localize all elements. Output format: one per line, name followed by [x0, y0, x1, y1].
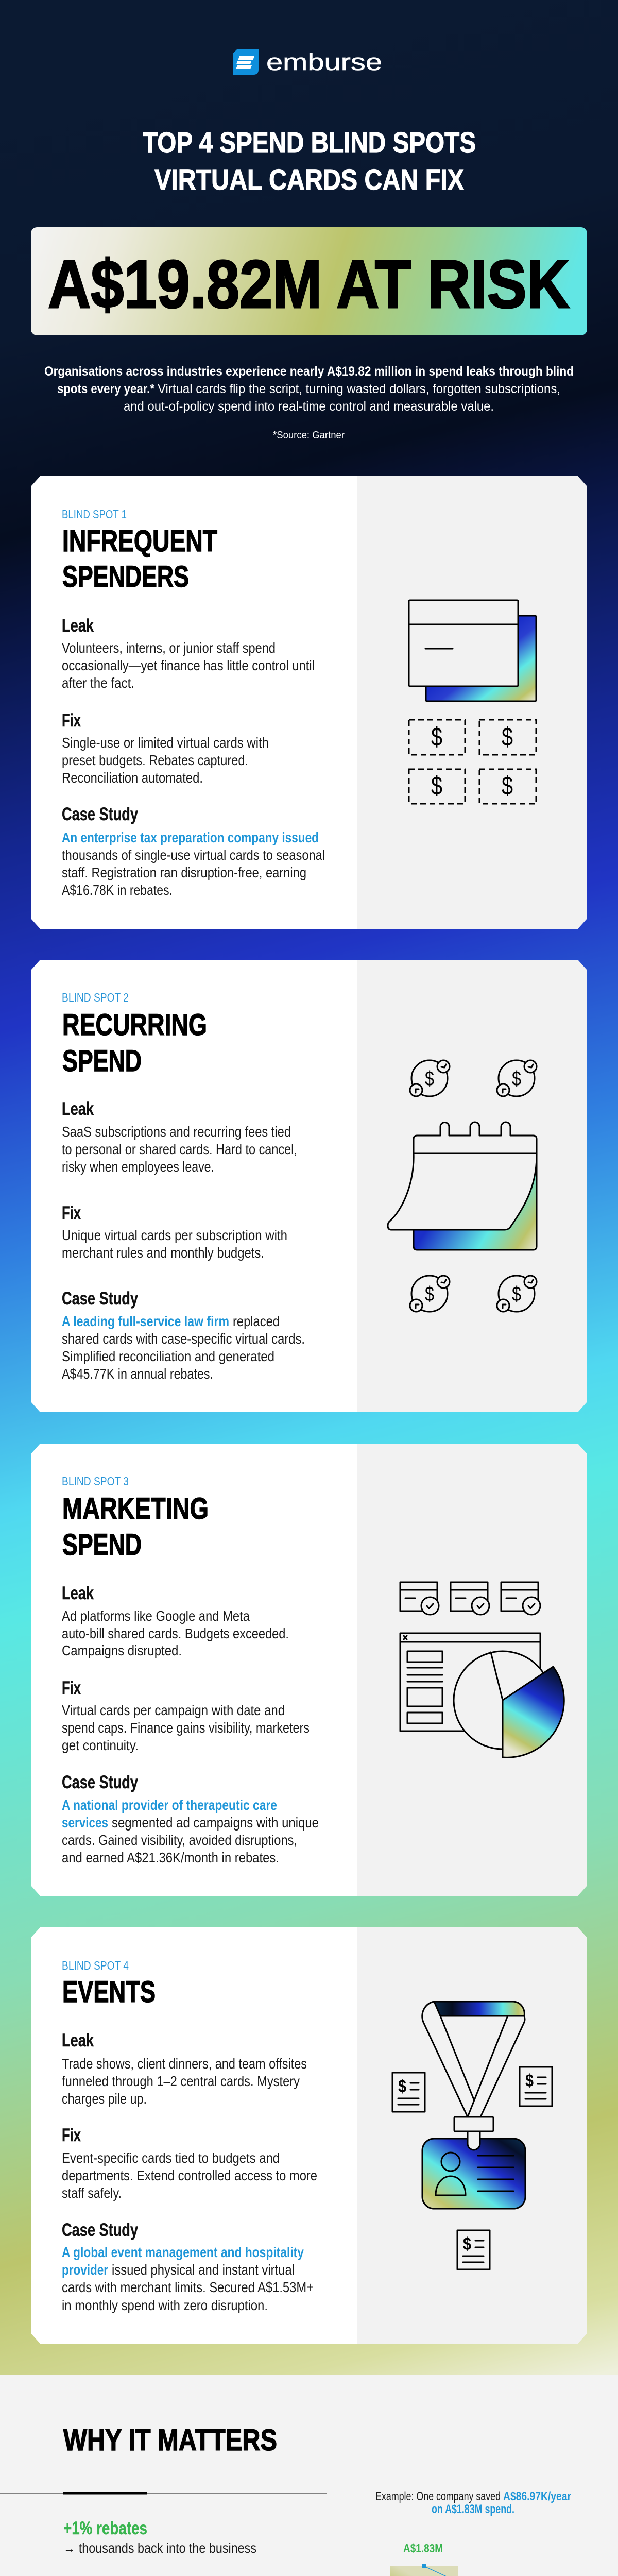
intro paragraph: and out-of-policy spend into real-time control and measurable value. — [124, 399, 494, 414]
heading: SPEND — [62, 1044, 142, 1078]
label: BLIND SPOT 3 — [62, 1475, 129, 1488]
case study: Case Study — [62, 1289, 138, 1309]
example caption — [375, 2489, 571, 2516]
leak: Leak — [62, 1099, 94, 1119]
icon: calendar with recurring coins: $ — [512, 1283, 521, 1306]
logo: emburse: emburse — [266, 49, 382, 75]
icon: lanyard badge with receipts: $ — [525, 2071, 534, 2091]
case study: issued physical and instant virtual — [112, 2262, 295, 2278]
leak: occasionally—yet finance has little control until — [62, 657, 315, 673]
leak: Ad platforms like Google and Meta — [62, 1608, 250, 1624]
case study: Simplified reconciliation and generated — [62, 1348, 274, 1364]
title: TOP 4 SPEND BLIND SPOTS — [143, 126, 476, 159]
intro paragraph — [44, 364, 574, 414]
case study: segmented ad campaigns with unique — [112, 1815, 319, 1831]
leak: after the fact. — [62, 675, 134, 691]
case study: cards with merchant limits. Secured A$1.53M+ — [62, 2279, 314, 2295]
leak: auto-bill shared cards. Budgets exceeded. — [62, 1625, 289, 1641]
fix: Fix — [62, 1203, 81, 1223]
fix: Fix — [62, 1678, 81, 1698]
heading: RECURRING — [62, 1008, 207, 1042]
case study — [62, 1772, 319, 1866]
fix: Single-use or limited virtual cards with — [62, 735, 269, 751]
heading — [62, 524, 217, 594]
case study — [62, 804, 325, 898]
panel: why it matters — [0, 2375, 618, 2576]
example caption: A$86.97K/year — [503, 2489, 571, 2503]
heading — [62, 1008, 207, 1078]
intro paragraph: Virtual cards flip the script, turning wasted dollars, forgotten subscriptions, — [158, 382, 560, 396]
heading — [62, 1492, 209, 1562]
case study: A$16.78K in rebates. — [62, 882, 173, 898]
fix: Fix — [62, 2125, 81, 2145]
case study: Case Study — [62, 1772, 138, 1792]
case study — [62, 1289, 305, 1382]
case study: replaced — [233, 1313, 280, 1329]
panel: blind spot 3 — [31, 1444, 587, 1896]
stat: rebates: → thousands back into the business — [63, 2540, 256, 2556]
fix: Virtual cards per campaign with date and — [62, 1702, 285, 1718]
example caption: on A$1.83M spend. — [432, 2502, 514, 2516]
logo: emburse — [233, 49, 382, 75]
label: BLIND SPOT 2 — [62, 991, 129, 1004]
panel: blind spot 2 — [31, 960, 587, 1412]
fix — [62, 2125, 317, 2201]
leak: SaaS subscriptions and recurring fees tied — [62, 1124, 291, 1140]
panel: blind spot 1 — [31, 476, 587, 929]
leak — [62, 1583, 289, 1658]
leak: Leak — [62, 616, 94, 636]
case study: shared cards with case-specific virtual cards. — [62, 1331, 305, 1347]
case study: An enterprise tax preparation company issued — [62, 829, 319, 845]
icon: stacked cards with dollar slots: $ — [431, 771, 442, 800]
leak: risky when employees leave. — [62, 1159, 214, 1175]
leak: Leak — [62, 2030, 94, 2050]
leak: Volunteers, interns, or junior staff spend — [62, 640, 276, 656]
source note: *Source: Gartner — [273, 430, 345, 441]
intro paragraph: Organisations across industries experience nearly A$19.82 million in spend leaks through blind — [44, 364, 574, 379]
panel: blind spot 4 — [31, 1927, 587, 2344]
case study: cards. Gained visibility, avoided disruptions, — [62, 1832, 297, 1848]
fix — [62, 710, 269, 786]
fix — [62, 1203, 287, 1261]
stat: rebates: +1% rebates — [63, 2518, 147, 2538]
icon: calendar with recurring coins: $ — [425, 1283, 434, 1306]
fix: get continuity. — [62, 1737, 139, 1753]
fix: Fix — [62, 710, 81, 731]
case study: Case Study — [62, 2220, 138, 2240]
icon: lanyard badge with receipts: $ — [463, 2234, 471, 2254]
example caption: Example: One company saved — [375, 2489, 501, 2503]
label: BLIND SPOT 4 — [62, 1959, 129, 1972]
icon: stacked cards with dollar slots: $ — [431, 722, 442, 751]
heading: EVENTS — [62, 1975, 156, 2009]
fix: departments. Extend controlled access to more — [62, 2167, 317, 2183]
icon: lanyard badge with receipts — [392, 2002, 552, 2269]
case study: in monthly spend with zero disruption. — [62, 2297, 268, 2313]
fix: merchant rules and monthly budgets. — [62, 1245, 264, 1261]
case study: A national provider of therapeutic care — [62, 1797, 277, 1813]
leak: funneled through 1–2 central cards. Mystery — [62, 2073, 300, 2089]
heading: WHY IT MATTERS — [63, 2424, 277, 2457]
leak — [62, 2030, 307, 2107]
icon: dashboard with pie chart — [400, 1582, 564, 1757]
icon: lanyard badge with receipts: $ — [398, 2077, 406, 2096]
case study: A leading full-service law firm — [62, 1313, 229, 1329]
fix: Unique virtual cards per subscription with — [62, 1227, 287, 1243]
case study: and earned A$21.36K/month in rebates. — [62, 1850, 279, 1866]
fix: Reconciliation automated. — [62, 770, 203, 786]
title: VIRTUAL CARDS CAN FIX — [154, 163, 464, 196]
fix — [62, 1678, 310, 1753]
case study: staff. Registration ran disruption-free, earning — [62, 865, 306, 880]
fix: spend caps. Finance gains visibility, marketers — [62, 1720, 310, 1736]
icon: calendar with recurring coins: $ — [425, 1067, 434, 1090]
case study: A$45.77K in annual rebates. — [62, 1366, 213, 1382]
title — [143, 126, 476, 196]
icon: calendar with recurring coins: $ — [512, 1067, 521, 1090]
icon: calendar with recurring coins — [388, 1060, 537, 1312]
leak: charges pile up. — [62, 2091, 147, 2107]
case study: provider — [62, 2262, 108, 2278]
case study: A global event management and hospitality — [62, 2244, 304, 2260]
leak: Trade shows, client dinners, and team offsites — [62, 2056, 307, 2072]
leak: Leak — [62, 1583, 94, 1603]
fix: Event-specific cards tied to budgets and — [62, 2150, 280, 2166]
stat: rebates — [0, 2492, 327, 2556]
heading: INFREQUENT — [62, 524, 217, 558]
leak — [62, 616, 315, 691]
label: BLIND SPOT 1 — [62, 507, 127, 521]
fix: staff safely. — [62, 2185, 122, 2201]
banner: A$19.82M at risk — [31, 227, 587, 335]
fix: preset budgets. Rebates captured. — [62, 752, 248, 768]
icon: stacked cards with dollar slots — [409, 600, 536, 804]
leak: to personal or shared cards. Hard to cancel, — [62, 1141, 297, 1157]
intro paragraph: spots every year.* — [57, 382, 154, 396]
case study: Case Study — [62, 804, 138, 824]
heading: SPENDERS — [62, 560, 189, 594]
leak: Campaigns disrupted. — [62, 1642, 182, 1658]
bar chart: before and after: A$1.83M — [403, 2541, 443, 2555]
icon: stacked cards with dollar slots: $ — [502, 771, 513, 800]
case study: thousands of single-use virtual cards to seasonal — [62, 847, 325, 863]
case study: services — [62, 1815, 108, 1831]
heading: SPEND — [62, 1528, 142, 1562]
case study — [62, 2220, 314, 2313]
heading: MARKETING — [62, 1492, 209, 1526]
icon: stacked cards with dollar slots: $ — [502, 722, 513, 751]
leak — [62, 1099, 297, 1175]
bar chart: before and after — [390, 2541, 557, 2576]
